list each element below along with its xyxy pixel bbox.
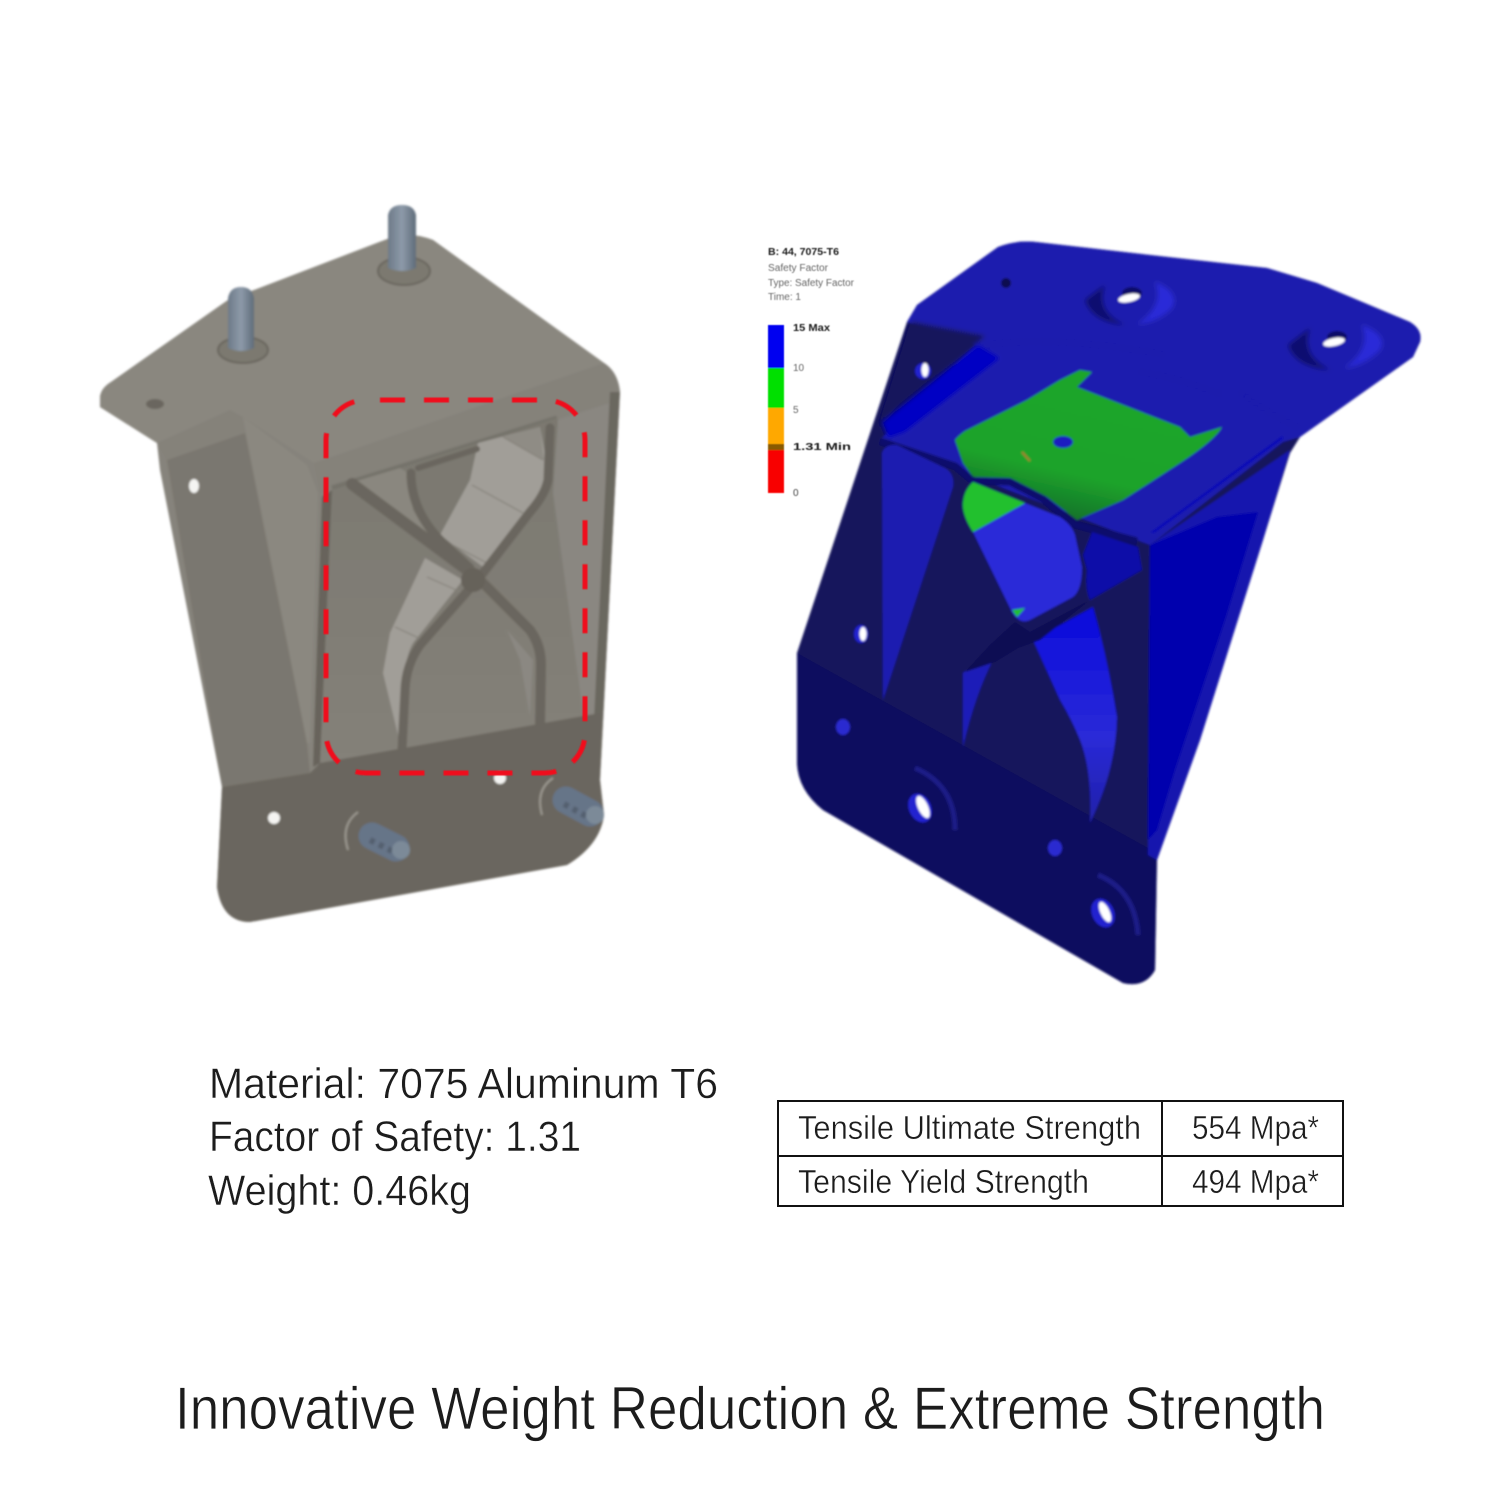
right small panel bbox=[1083, 532, 1142, 600]
top plate bbox=[100, 235, 604, 463]
legend scale labels: 10 bbox=[793, 363, 805, 374]
legend header text: Type: Safety Factor bbox=[768, 278, 855, 289]
dark fold under band bbox=[880, 441, 1137, 541]
upper twisted panel blue bbox=[973, 503, 1082, 621]
plate boss right bbox=[1288, 325, 1382, 370]
recess left shadow bbox=[313, 490, 332, 767]
small green patch bbox=[1012, 608, 1025, 617]
material line: Material: 7075 Aluminum T6 bbox=[209, 1060, 718, 1108]
legend scale labels: 5 bbox=[793, 405, 799, 416]
left tab band bbox=[157, 410, 245, 460]
legend scale labels: 1.31 Min bbox=[793, 442, 851, 453]
strength table bbox=[778, 1101, 1343, 1206]
bolt right bbox=[564, 800, 604, 824]
truss X arms bbox=[352, 428, 550, 750]
left gusset bbox=[243, 417, 318, 743]
bright plate edge bbox=[882, 345, 1000, 438]
plate upper left shadow bbox=[880, 322, 985, 425]
panel crease lines bbox=[395, 437, 543, 640]
upper left pocket bbox=[350, 468, 430, 537]
factor of safety line: Factor of Safety: 1.31 bbox=[209, 1113, 581, 1161]
left gusset blue bbox=[882, 445, 953, 700]
plate mottling bbox=[985, 342, 1300, 428]
hole dot right bbox=[1048, 840, 1062, 856]
red dashed highlight box bbox=[326, 400, 585, 773]
white holes bbox=[189, 479, 506, 824]
legend scale labels: 15 Max bbox=[793, 323, 830, 334]
safety factor legend bbox=[768, 247, 855, 499]
legend header text: B: 44, 7075-T6 bbox=[768, 247, 839, 258]
table row tensile yield bbox=[798, 1163, 1319, 1200]
side plate deep blue bbox=[1148, 512, 1258, 840]
legend header text: Time: 1 bbox=[768, 292, 801, 303]
table row tensile yield: Tensile Yield Strength bbox=[798, 1163, 1089, 1200]
recess back wall bbox=[320, 418, 600, 763]
blue stress analysis bracket bbox=[797, 242, 1421, 984]
truss top branch bbox=[418, 449, 477, 468]
upper twisted light panel bbox=[440, 427, 548, 567]
right gusset bbox=[553, 403, 610, 720]
right edge strip bbox=[594, 392, 620, 780]
grey CAD bracket bbox=[100, 205, 620, 922]
washer arcs bbox=[346, 778, 553, 850]
stud left bbox=[228, 287, 254, 351]
flange hole left bbox=[268, 812, 280, 824]
recess pocket between branches bbox=[417, 450, 477, 535]
plate boss left bbox=[1085, 282, 1174, 325]
main title: Innovative Weight Reduction & Extreme Strength bbox=[175, 1375, 1325, 1442]
lower flange shade bbox=[797, 653, 1157, 984]
table row tensile ultimate: Tensile Ultimate Strength bbox=[798, 1109, 1141, 1146]
dark truss node bbox=[965, 600, 1090, 672]
truss arm descending lower bbox=[477, 577, 541, 728]
hole upper bbox=[915, 363, 931, 379]
legend colour bar bbox=[768, 325, 784, 493]
stud base left bbox=[218, 337, 268, 363]
upper panel tip bbox=[503, 427, 544, 460]
truss upper branch bbox=[411, 473, 470, 568]
legend scale labels: 0 bbox=[793, 488, 799, 499]
hole middle bbox=[854, 625, 868, 643]
legend header text: Safety Factor bbox=[768, 263, 829, 274]
green stress zone on plate bbox=[955, 370, 1222, 520]
flange boss arcs bbox=[915, 768, 1138, 935]
band lower shade bbox=[332, 418, 557, 488]
side plate outer bbox=[1148, 450, 1290, 860]
material specification text bbox=[208, 1060, 718, 1215]
lower twisted light panel bbox=[383, 558, 463, 743]
small orange mark bbox=[1022, 452, 1030, 461]
flange hole left bbox=[904, 790, 936, 826]
left outer panel bbox=[167, 433, 310, 787]
bottom flange bbox=[217, 713, 604, 922]
legend header text bbox=[768, 247, 855, 303]
stud base right bbox=[378, 257, 430, 285]
small plate hole dark bbox=[1001, 278, 1011, 288]
table row tensile yield: 494 Mpa* bbox=[1192, 1163, 1319, 1200]
washer right bbox=[540, 778, 553, 815]
holes on dark panel bbox=[836, 363, 1119, 931]
lower right blade bbox=[1033, 607, 1117, 823]
truss node bbox=[461, 568, 485, 592]
side plate crease bbox=[1152, 437, 1283, 533]
stud right bbox=[388, 205, 416, 271]
blue silhouette dark base bbox=[797, 242, 1421, 984]
green zone hole bbox=[1053, 436, 1073, 448]
bolt centre bbox=[370, 836, 410, 859]
table frame bbox=[778, 1101, 1343, 1206]
weight line: Weight: 0.46kg bbox=[208, 1167, 471, 1215]
lower right sliver bbox=[507, 630, 533, 717]
left panel hole bbox=[189, 479, 199, 493]
washer centre bbox=[346, 812, 358, 850]
flange hole right bbox=[1087, 895, 1119, 931]
truss arm descending upper bbox=[352, 484, 477, 577]
table row tensile ultimate: 554 Mpa* bbox=[1192, 1109, 1319, 1146]
small plate hole bbox=[146, 399, 164, 409]
upper twisted panel green bbox=[963, 482, 1025, 532]
legend scale labels bbox=[793, 323, 851, 499]
bracket silhouette bbox=[100, 235, 620, 922]
truss arm ascending bbox=[402, 428, 550, 750]
front rounded band bbox=[314, 363, 620, 493]
hole dot left bbox=[836, 719, 850, 735]
lower left small blade bbox=[963, 660, 993, 747]
flange hole right bbox=[494, 772, 506, 784]
top plate bbox=[880, 242, 1421, 545]
